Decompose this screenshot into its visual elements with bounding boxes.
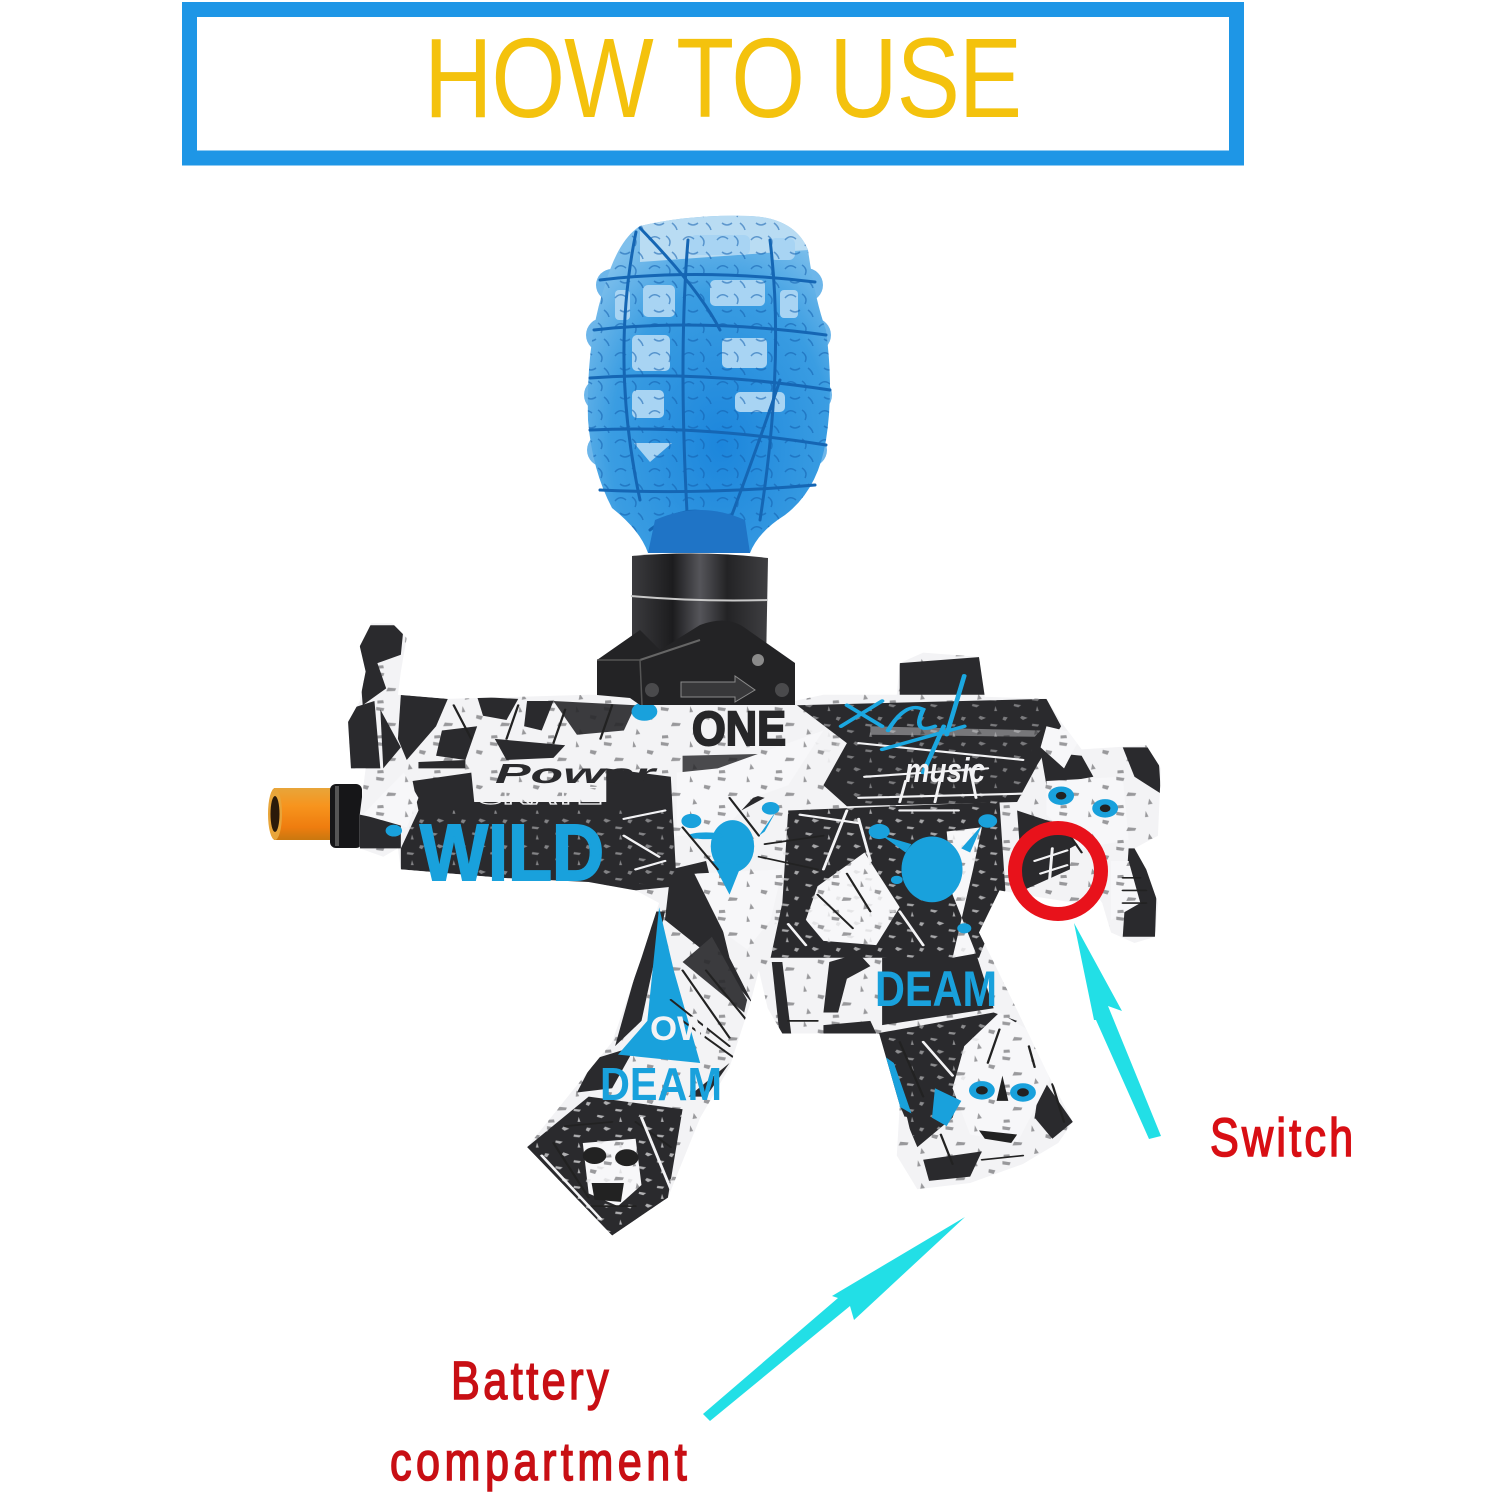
- front sight: [360, 625, 404, 705]
- script lettering: [841, 676, 964, 773]
- label: switch: Switch: [1210, 1109, 1353, 1168]
- loader housing with arrow: [597, 621, 795, 705]
- cyan arrow: battery compartment: [703, 1217, 965, 1421]
- muzzle tip: [268, 784, 362, 848]
- graffiti words: DEAM: [600, 1058, 722, 1110]
- label: battery compartment: Battery: [451, 1352, 609, 1411]
- graffiti words: OW: [650, 1010, 711, 1048]
- graffiti words: music: [905, 752, 985, 790]
- graffiti words: DEAM: [875, 961, 997, 1017]
- receiver rear: [797, 699, 1061, 806]
- graffiti gun body: [268, 617, 1170, 1240]
- magazine blue panel: [618, 907, 961, 1126]
- fine texture: [342, 617, 1170, 1240]
- label: battery compartment: compartment: [390, 1433, 687, 1492]
- cyan arrow: switch: [1074, 923, 1161, 1139]
- arrow mark: [681, 676, 755, 702]
- black loader cylinder: [631, 553, 768, 665]
- title text: HOW TO USE: [424, 16, 1022, 142]
- graffiti words: ONE: [692, 703, 786, 756]
- graffiti words: [420, 703, 997, 1110]
- skull details: [386, 702, 1118, 1102]
- central dark: [771, 802, 1005, 958]
- graffiti words: SKATE: [478, 783, 602, 810]
- grip: [876, 1012, 1017, 1147]
- magazine: [615, 911, 665, 1046]
- graffiti words: WILD: [420, 808, 604, 897]
- scribble details: [454, 705, 1146, 1206]
- gel ball grenade magazine: [580, 210, 840, 555]
- trigger: [823, 954, 870, 1012]
- label: battery compartment: [390, 1352, 687, 1492]
- red circle: switch location: [1015, 828, 1101, 914]
- lower barrel: [401, 768, 677, 890]
- graffiti words: Power: [495, 758, 659, 789]
- title banner: [190, 10, 1236, 158]
- stock: [1041, 752, 1093, 785]
- upper barrel patches: [398, 695, 448, 760]
- white skulls and wings: [363, 726, 1140, 1206]
- blue paint splats: [681, 802, 997, 933]
